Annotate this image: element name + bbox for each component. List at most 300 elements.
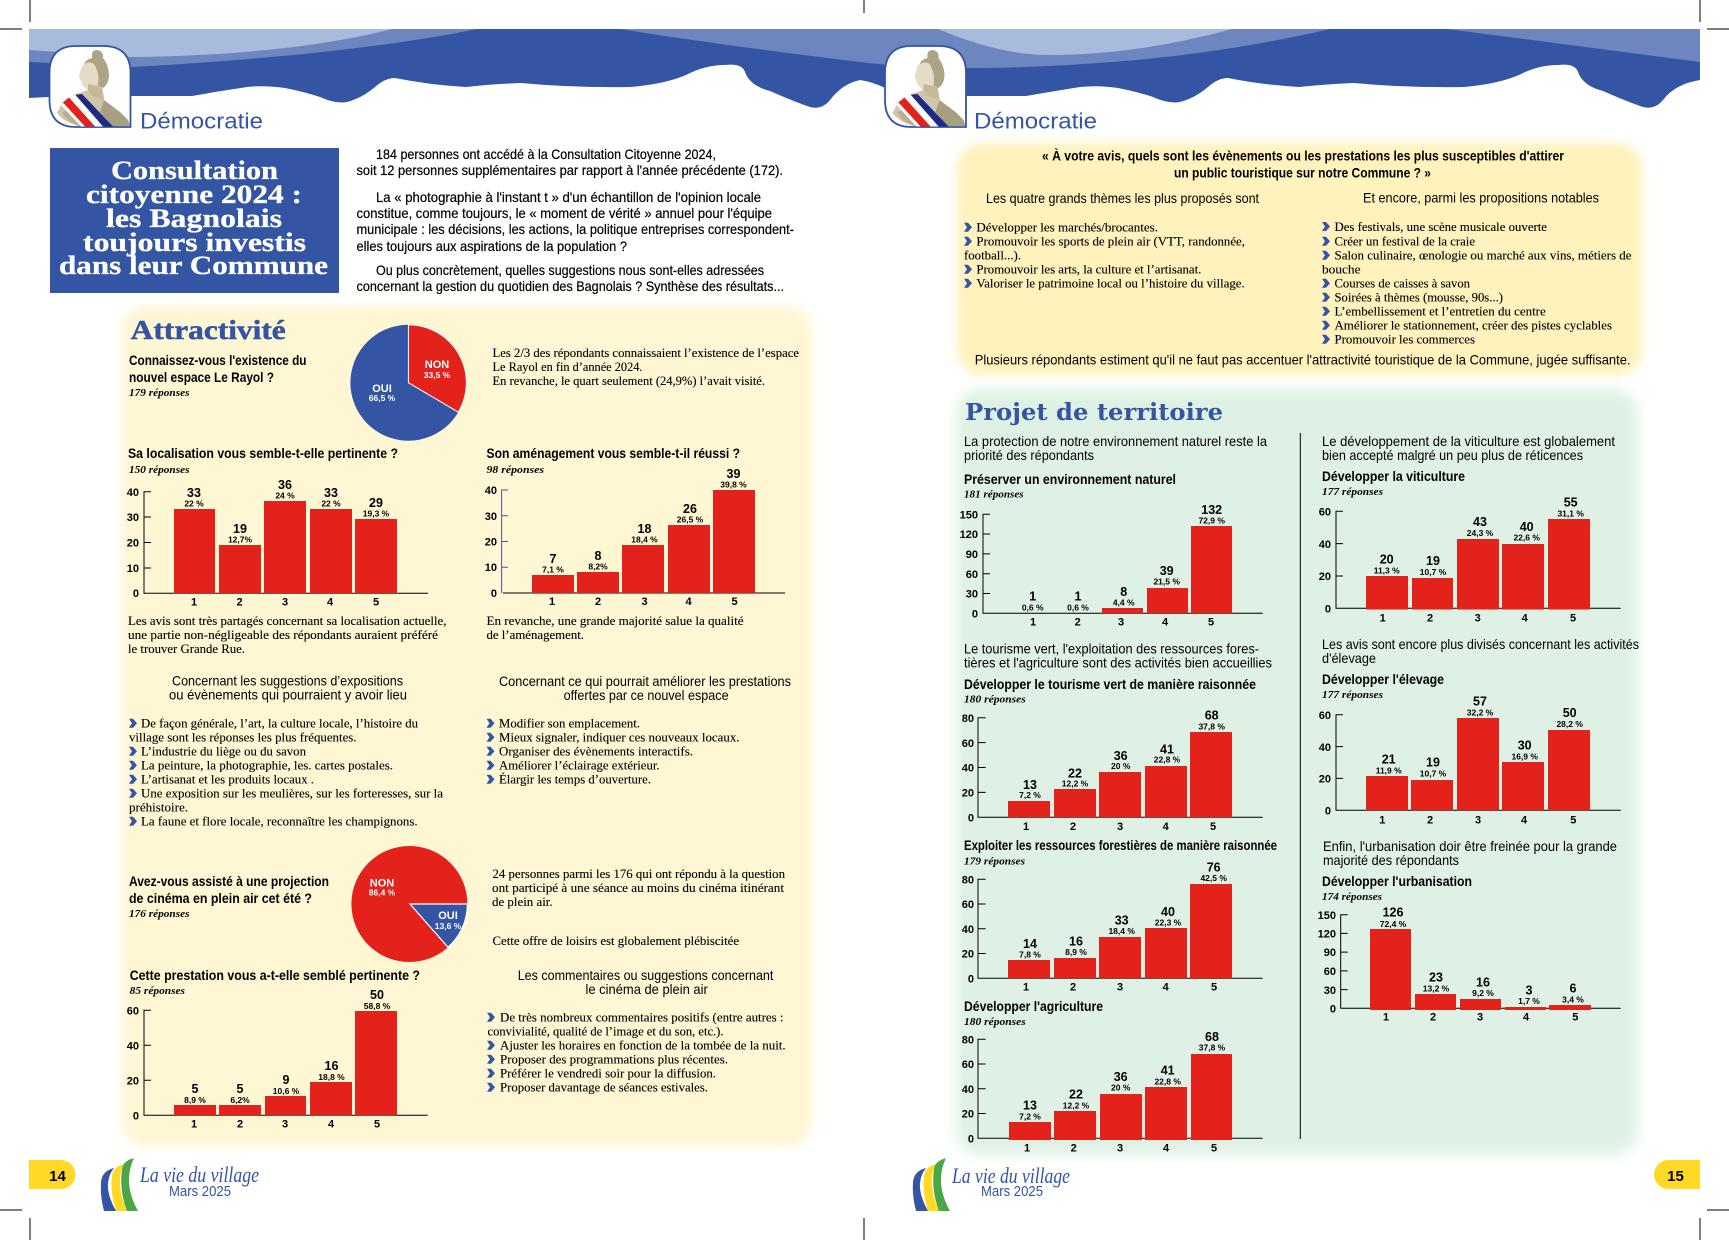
question: prestation cinéma: 85 réponses <box>130 985 185 997</box>
text: commentaire aménagement: de l’aménagement. <box>486 627 584 642</box>
bar chart: ressources forestières: 3 <box>1117 982 1123 994</box>
intro text: municipale : les décisions, les actions, la politique entreprises correspondent- <box>356 221 794 237</box>
text and question: viticulture: 177 réponses <box>1322 486 1383 498</box>
bar chart: environnement naturel: 72,9 % <box>1198 516 1225 526</box>
text and question: environnement naturel: La protection de notre environnement naturel reste la <box>964 433 1267 449</box>
bar chart: prestation cinéma: 1 <box>191 1119 197 1131</box>
bar chart: environnement naturel: 4 <box>1162 617 1169 629</box>
subheading: améliorer les prestations: offertes par ce nouvel espace <box>564 687 729 703</box>
bar chart: élevage: 57 <box>1473 694 1487 708</box>
question: aménagement: Son aménagement vous semble-t-il réussi ? <box>486 445 740 461</box>
question: ressources forestières: Exploiter les ressources forestières de manière raisonnée <box>964 837 1277 853</box>
list: suggestions d'expositions: De façon générale, l’art, la culture locale, l’histoire du <box>141 716 418 731</box>
text: commentaire localisation <box>128 613 446 656</box>
bar chart: prestation cinéma: 3 <box>282 1119 288 1131</box>
pie chart: espace Le Rayol: NON <box>425 359 449 371</box>
list: propositions notables: bouche <box>1322 262 1361 277</box>
text: participation cinéma: de plein air. <box>492 894 553 909</box>
page number 15 <box>1654 1160 1700 1189</box>
bar chart: urbanisation: 3 <box>1477 1012 1483 1024</box>
bar chart: prestation cinéma: 0 <box>133 1110 139 1122</box>
bar chart: viticulture: 0 <box>1325 604 1331 616</box>
bar chart: élevage: 32,2 % <box>1467 708 1494 718</box>
column divider <box>1299 433 1301 1139</box>
conclusion: Plusieurs répondants estiment qu'il ne faut pas accentuer l'attractivité touristique de la Commune, jugée suffisante. <box>975 352 1630 368</box>
subheading: suggestions d'expositions <box>169 673 407 703</box>
bar chart: urbanisation: 120 <box>1318 928 1336 940</box>
bar chart: ressources forestières: 80 <box>962 874 974 886</box>
column heading right: Et encore, parmi les propositions notables <box>1363 190 1599 206</box>
bar chart: ressources forestières: 16 <box>1069 934 1083 948</box>
bar chart: aménagement: 30 <box>485 511 497 523</box>
bar chart: environnement naturel: 30 <box>966 588 978 600</box>
subheading: commentaires cinéma: le cinéma de plein air <box>586 981 708 997</box>
bar chart: tourisme vert: 3 <box>1117 821 1123 833</box>
section label left: Démocratie <box>140 108 263 134</box>
bar chart: aménagement: 7,1 % <box>542 564 564 574</box>
bar chart: agriculture: 80 <box>962 1034 974 1046</box>
text: commentaire aménagement: En revanche, une grande majorité salue la qualité <box>486 613 744 628</box>
bar chart: élevage: 20 <box>1319 774 1331 786</box>
bar chart: environnement naturel: 2 <box>1075 617 1081 629</box>
bar chart: aménagement: 26,5 % <box>677 514 704 524</box>
list: améliorer les prestations: Modifier son emplacement. <box>499 716 640 731</box>
bar chart: environnement naturel: 0,6 % <box>1022 602 1044 612</box>
pie chart: cinéma plein air <box>351 846 467 962</box>
bar chart: urbanisation: 5 <box>1572 1012 1578 1024</box>
list: quatre grands thèmes: football...). <box>964 248 1021 263</box>
bar chart: environnement naturel: 4,4 % <box>1113 597 1135 607</box>
list: suggestions d'expositions: village sont les réponses les plus fréquentes. <box>129 730 356 745</box>
bar chart: environnement naturel: 8 <box>1120 585 1127 599</box>
title box: Consultation <box>111 155 278 185</box>
logo: La vie du village, right <box>913 1158 1070 1211</box>
list: propositions notables: Créer un festival de la craie <box>1334 234 1475 249</box>
question: cinéma plein air: de cinéma en plein air cet été ? <box>129 890 312 906</box>
list: propositions notables: Salon culinaire, œnologie ou marché aux vins, métiers de <box>1334 248 1632 263</box>
question: aménagement: 98 réponses <box>486 464 544 476</box>
bar chart: viticulture: 43 <box>1473 515 1487 529</box>
bar chart: urbanisation: 4 <box>1523 1012 1530 1024</box>
question: ressources forestières: 179 réponses <box>964 855 1025 867</box>
bar chart: ressources forestières: 1 <box>1023 982 1029 994</box>
section label right: Démocratie <box>974 108 1097 134</box>
bar chart: agriculture: 37,8 % <box>1199 1043 1226 1053</box>
bar chart: prestation cinéma: 20 <box>127 1076 139 1088</box>
bar chart: ressources forestières: 18,4 % <box>1108 926 1135 936</box>
question text: « À votre avis, quels sont les évènements ou les prestations les plus susceptibles d'attirer <box>1042 148 1564 164</box>
intro text: 184 personnes ont accédé à la Consultation Citoyenne 2024, <box>376 146 716 162</box>
bar chart: localisation: 2 <box>236 597 243 609</box>
bar chart: urbanisation: 72,4 % <box>1380 919 1407 929</box>
bar chart: élevage: 4 <box>1521 814 1528 826</box>
bar chart: élevage: 2 <box>1427 814 1433 826</box>
bar chart: prestation cinéma: 58,8 % <box>364 1001 391 1011</box>
bar chart: viticulture: 60 <box>1319 506 1331 518</box>
bar chart: agriculture: 2 <box>1071 1143 1077 1155</box>
question block: attractivité touristique <box>964 148 1632 368</box>
bar chart: localisation: 40 <box>127 487 139 499</box>
list: commentaires cinéma <box>487 1010 786 1095</box>
panel: Projet de territoire background <box>956 389 1638 1155</box>
bar chart: tourisme vert: 22 <box>1068 767 1082 781</box>
list: suggestions d'expositions: préhistoire. <box>129 800 188 815</box>
bar chart: élevage <box>1319 694 1621 826</box>
bar chart: urbanisation: 60 <box>1324 966 1336 978</box>
bar chart: agriculture: 68 <box>1205 1030 1219 1044</box>
text: commentaire localisation: Les avis sont très partagés concernant sa localisation actuelle, <box>128 613 446 628</box>
bar chart: aménagement: 2 <box>595 596 601 608</box>
bar chart: urbanisation: 16 <box>1476 976 1490 990</box>
page number 14 <box>29 1160 76 1189</box>
question: espace Le Rayol: Connaissez-vous l'existence du <box>129 352 306 368</box>
bar chart: viticulture: 11,3 % <box>1374 566 1400 576</box>
bar chart: localisation: 33 <box>324 486 338 500</box>
bar chart: ressources forestières: 0 <box>968 974 974 986</box>
bar chart: environnement naturel: 1 <box>1030 617 1036 629</box>
subheading: améliorer les prestations <box>499 673 791 703</box>
bar chart: urbanisation: 6 <box>1570 981 1577 995</box>
bar chart: tourisme vert <box>962 709 1263 833</box>
bar chart: agriculture: 40 <box>962 1084 974 1096</box>
bar chart: environnement naturel: 3 <box>1118 617 1124 629</box>
bar chart: localisation: 36 <box>278 478 292 492</box>
bar chart: localisation: 5 <box>373 597 379 609</box>
bar chart: prestation cinéma: 18,8 % <box>318 1072 345 1082</box>
question: cinéma plein air: Avez-vous assisté à une projection <box>129 873 329 889</box>
bar chart: ressources forestières: 2 <box>1070 982 1076 994</box>
bar chart: localisation: 4 <box>327 597 334 609</box>
bar chart: ressources forestières: 42,5 % <box>1200 873 1227 883</box>
bar chart: aménagement: 7 <box>550 552 557 566</box>
list: commentaires cinéma: Préférer le vendredi soir pour la diffusion. <box>500 1066 716 1081</box>
bar chart: aménagement: 18 <box>638 522 651 536</box>
bar chart: environnement naturel: 150 <box>960 510 978 522</box>
text and question: viticulture <box>1322 433 1615 498</box>
panel: top right question background <box>957 143 1642 375</box>
bar chart: localisation: 1 <box>191 597 197 609</box>
text and question: environnement naturel <box>964 433 1267 501</box>
question: ressources forestières <box>964 837 1277 867</box>
panel: Attractivité background <box>121 306 812 1146</box>
bar chart: localisation: 19,3 % <box>363 508 390 518</box>
list: commentaires cinéma: Proposer davantage de séances estivales. <box>500 1080 708 1095</box>
bar chart: localisation: 24 % <box>275 490 295 500</box>
list: suggestions d'expositions: L’industrie du liège ou du savon <box>141 744 306 759</box>
subheading: améliorer les prestations: Concernant ce qui pourrait améliorer les prestations <box>499 673 791 689</box>
logo: La vie du village, left: La vie du village <box>139 1162 259 1187</box>
text and question: tourisme vert <box>964 640 1272 706</box>
bar chart: aménagement: 18,4 % <box>631 534 658 544</box>
text and question: urbanisation: majorité des répondants <box>1323 852 1459 868</box>
text and question: élevage: Les avis sont encore plus divisés concernant les activités <box>1322 636 1639 652</box>
bar chart: environnement naturel: 60 <box>966 569 978 581</box>
bar chart: ressources forestières: 14 <box>1023 937 1037 951</box>
text and question: urbanisation: Développer l'urbanisation <box>1322 873 1472 889</box>
bar chart: urbanisation: 150 <box>1318 910 1336 922</box>
question: espace Le Rayol: nouvel espace Le Rayol ? <box>129 369 274 385</box>
bar chart: prestation cinéma: 60 <box>127 1006 139 1018</box>
subheading: commentaires cinéma: Les commentaires ou suggestions concernant <box>518 967 773 983</box>
bar chart: agriculture: 36 <box>1114 1070 1128 1084</box>
bar chart: élevage: 21 <box>1382 753 1396 767</box>
subheading: suggestions d'expositions: Concernant les suggestions d’expositions <box>172 673 403 689</box>
bar chart: urbanisation: 0 <box>1330 1004 1336 1016</box>
bar chart: viticulture: 31,1 % <box>1557 508 1584 518</box>
bar chart: prestation cinéma: 9 <box>283 1073 290 1087</box>
bar chart: ressources forestières: 40 <box>962 924 974 936</box>
intro text <box>356 146 794 294</box>
text and question: viticulture: Développer la viticulture <box>1322 468 1465 484</box>
bar chart: prestation cinéma: 8,9 % <box>184 1095 206 1105</box>
bar chart: urbanisation: 30 <box>1324 985 1336 997</box>
pie chart: cinéma plein air: 13,6 % <box>435 921 462 931</box>
text and question: environnement naturel: priorité des répondants <box>964 447 1094 463</box>
bar chart: prestation cinéma <box>127 988 428 1131</box>
bar chart: viticulture: 2 <box>1427 613 1433 625</box>
text and question: élevage: Développer l'élevage <box>1322 671 1444 687</box>
question text: un public touristique sur notre Commune ? » <box>1174 165 1431 181</box>
bar chart: viticulture: 24,3 % <box>1467 528 1494 538</box>
bar chart: tourisme vert: 5 <box>1210 821 1216 833</box>
intro text: elles toujours aux aspirations de la population ? <box>356 238 627 254</box>
bar chart: ressources forestières: 60 <box>962 899 974 911</box>
bar chart: agriculture: 4 <box>1163 1143 1170 1155</box>
bar chart: agriculture: 5 <box>1211 1143 1217 1155</box>
question: espace Le Rayol: 179 réponses <box>129 387 190 399</box>
subheading: suggestions d'expositions: ou évènements qui pourraient y avoir lieu <box>169 687 407 703</box>
intro text: constitue, comme toujours, le « moment de vérité » annuel pour l'équipe <box>356 205 772 221</box>
bar chart: tourisme vert: 37,8 % <box>1198 721 1225 731</box>
logo: La vie du village, left <box>101 1158 259 1211</box>
bar chart: localisation: 22 % <box>184 499 204 509</box>
bar chart: prestation cinéma: 2 <box>237 1119 243 1131</box>
bar chart: aménagement: 5 <box>731 596 738 608</box>
bar chart: agriculture: 22 <box>1069 1087 1083 1101</box>
bar chart: tourisme vert: 68 <box>1205 709 1219 723</box>
logo: La vie du village, right: La vie du village <box>951 1163 1070 1188</box>
bar chart: urbanisation: 90 <box>1324 947 1336 959</box>
bar chart: aménagement: 39,8 % <box>720 480 747 490</box>
text: commentaire localisation: le trouver Grande Rue. <box>128 641 245 656</box>
bar chart: ressources forestières: 8,9 % <box>1065 947 1087 957</box>
bar chart: urbanisation: 1,7 % <box>1518 996 1540 1006</box>
bar chart: viticulture: 55 <box>1564 495 1578 509</box>
list: quatre grands thèmes: Développer les marchés/brocantes. <box>976 220 1158 235</box>
list: suggestions d'expositions: La peinture, la photographie, les. cartes postales. <box>141 758 393 773</box>
header wave band <box>29 29 1700 108</box>
text and question: environnement naturel: 181 réponses <box>964 489 1024 501</box>
list: propositions notables: L’embellissement et l’entretien du centre <box>1334 304 1546 319</box>
bar chart: ressources forestières: 20 <box>962 948 974 960</box>
list: améliorer les prestations <box>486 716 740 787</box>
bar chart: localisation: 19 <box>233 522 247 536</box>
bar chart: aménagement: 3 <box>641 596 648 608</box>
question: espace Le Rayol <box>129 352 306 399</box>
title box: les Bagnolais <box>106 203 282 233</box>
bar chart: tourisme vert: 40 <box>962 762 974 774</box>
intro text: concernant la gestion du quotidien des Bagnolais ? Synthèse des résultats... <box>356 278 784 294</box>
bar chart: urbanisation: 2 <box>1430 1012 1436 1024</box>
text and question: élevage: d'élevage <box>1322 650 1376 666</box>
text and question: tourisme vert: 180 réponses <box>964 694 1026 706</box>
text: participation cinéma: 24 personnes parmi les 176 qui ont répondu à la question <box>492 866 785 881</box>
bar chart: élevage: 50 <box>1563 706 1577 720</box>
bar chart: viticulture: 22,6 % <box>1513 533 1540 543</box>
text: commentaire aménagement <box>486 613 744 642</box>
intro text: La « photographie à l'instant t » d'un échantillon de l'opinion locale <box>376 189 761 205</box>
list: quatre grands thèmes: Promouvoir les sports de plein air (VTT, randonnée, <box>976 234 1245 249</box>
bar chart: environnement naturel: 1 <box>1075 590 1082 604</box>
bar chart: environnement naturel: 5 <box>1208 617 1214 629</box>
bar chart: localisation: 10 <box>127 563 139 575</box>
bar chart: tourisme vert: 20 <box>962 788 974 800</box>
bar chart: élevage: 3 <box>1475 814 1481 826</box>
bar chart: ressources forestières: 22,3 % <box>1155 918 1182 928</box>
bar chart: ressources forestières: 4 <box>1163 982 1170 994</box>
bar chart: agriculture <box>962 1030 1263 1155</box>
list: améliorer les prestations: Améliorer l’éclairage extérieur. <box>499 758 660 773</box>
page number 15: 15 <box>1667 1168 1684 1185</box>
bar chart: localisation: 22 % <box>321 499 341 509</box>
bar chart: viticulture: 5 <box>1570 613 1576 625</box>
list: améliorer les prestations: Mieux signaler, indiquer ces nouveaux locaux. <box>499 730 740 745</box>
bar chart: viticulture: 19 <box>1426 554 1440 568</box>
list: quatre grands thèmes <box>964 220 1245 291</box>
column heading left: Les quatre grands thèmes les plus proposés sont <box>986 190 1259 206</box>
title box: citoyenne 2024 : <box>86 179 302 209</box>
bar chart: ressources forestières: 5 <box>1211 982 1217 994</box>
bar chart: tourisme vert: 13 <box>1023 778 1037 792</box>
question: prestation cinéma <box>130 967 420 997</box>
bar chart: agriculture: 22,8 % <box>1154 1077 1181 1087</box>
bar chart: agriculture: 20 <box>962 1108 974 1120</box>
bar chart: tourisme vert: 0 <box>968 812 974 824</box>
list: améliorer les prestations: Organiser des évènements interactifs. <box>499 744 693 759</box>
text and question: élevage: 177 réponses <box>1322 689 1383 701</box>
bar chart: prestation cinéma: 6,2% <box>230 1095 250 1105</box>
bar chart: environnement naturel: 0,6 % <box>1067 602 1089 612</box>
text and question: viticulture: Le développement de la viticulture est globalement <box>1322 433 1615 449</box>
bar chart: ressources forestières <box>962 860 1263 994</box>
pie chart: cinéma plein air: OUI <box>438 910 458 922</box>
bar chart: localisation: 29 <box>369 496 383 510</box>
bar chart: élevage: 0 <box>1325 806 1331 818</box>
bar chart: élevage: 40 <box>1319 742 1331 754</box>
bar chart: aménagement: 10 <box>485 562 497 574</box>
bar chart: agriculture: 0 <box>968 1134 974 1146</box>
heading: Attractivité: Attractivité <box>131 315 286 345</box>
list: propositions notables: Améliorer le stationnement, créer des pistes cyclables <box>1334 318 1612 333</box>
list: suggestions d'expositions: La faune et flore locale, reconnaître les champignons. <box>141 814 418 829</box>
bar chart: tourisme vert: 1 <box>1023 821 1029 833</box>
bar chart: tourisme vert: 80 <box>962 713 974 725</box>
bar chart: agriculture: 1 <box>1024 1143 1030 1155</box>
bar chart: urbanisation <box>1318 906 1621 1024</box>
bar chart: viticulture: 40 <box>1319 539 1331 551</box>
text and question: tourisme vert: Développer le tourisme vert de manière raisonnée <box>964 676 1256 692</box>
bar chart: environnement naturel: 0 <box>972 608 978 620</box>
text: participation cinéma: Cette offre de loisirs est globalement plébiscitée <box>492 933 739 948</box>
bar chart: localisation: 12,7% <box>228 534 252 544</box>
title box: dans leur Commune <box>59 250 328 280</box>
bar chart: tourisme vert: 2 <box>1070 821 1076 833</box>
bar chart: tourisme vert: 36 <box>1114 749 1128 763</box>
bar chart: environnement naturel <box>960 503 1263 629</box>
pie chart: cinéma plein air: NON <box>370 878 394 890</box>
bar chart: urbanisation: 13,2 % <box>1423 984 1450 994</box>
bar chart: urbanisation: 3,4 % <box>1562 995 1584 1005</box>
question: cinéma plein air <box>129 873 329 920</box>
bar chart: élevage: 19 <box>1426 755 1440 769</box>
text: connaissance du lieu <box>492 345 799 388</box>
icon: Marianne bust, right page <box>885 46 966 127</box>
bar chart: viticulture: 20 <box>1319 571 1331 583</box>
bar chart: environnement naturel: 120 <box>960 529 978 541</box>
question text <box>1042 148 1564 181</box>
text and question: élevage <box>1322 636 1639 701</box>
question: aménagement <box>486 445 740 476</box>
bar chart: aménagement <box>485 467 785 608</box>
list: propositions notables: Soirées à thèmes (mousse, 90s...) <box>1334 290 1503 305</box>
text and question: environnement naturel: Préserver un environnement naturel <box>964 471 1176 487</box>
list: commentaires cinéma: Proposer des programmations plus récentes. <box>500 1052 728 1067</box>
list: améliorer les prestations: Élargir les temps d’ouverture. <box>499 772 651 787</box>
text: connaissance du lieu: En revanche, le quart seulement (24,9%) l’avait visité. <box>492 373 765 388</box>
bar chart: agriculture: 60 <box>962 1059 974 1071</box>
bar chart: élevage: 28,2 % <box>1556 719 1583 729</box>
bar chart: environnement naturel: 1 <box>1029 590 1036 604</box>
bar chart: agriculture: 41 <box>1161 1064 1175 1078</box>
bar chart: viticulture: 1 <box>1380 613 1386 625</box>
list: propositions notables: Des festivals, une scène musicale ouverte <box>1334 219 1547 234</box>
list: propositions notables <box>1322 219 1632 347</box>
text: participation cinéma: ont participé à une séance au moins du cinéma itinérant <box>492 880 784 895</box>
bar chart: aménagement: 1 <box>549 596 555 608</box>
bar chart: aménagement: 20 <box>485 536 497 548</box>
bar chart: tourisme vert: 4 <box>1163 821 1170 833</box>
bar chart: élevage: 60 <box>1319 710 1331 722</box>
bar chart: viticulture: 3 <box>1475 613 1481 625</box>
logo: La vie du village, left: Mars 2025 <box>169 1183 231 1200</box>
list: suggestions d'expositions: L’artisanat et les produits locaux . <box>141 772 314 787</box>
bar chart: tourisme vert: 12,2 % <box>1062 779 1089 789</box>
bar chart: agriculture: 7,2 % <box>1019 1111 1041 1121</box>
list: commentaires cinéma: convivialité, qualité de l’image et du son, etc.). <box>488 1024 724 1039</box>
pie chart: espace Le Rayol: OUI <box>372 383 392 395</box>
bar chart: prestation cinéma: 4 <box>328 1119 335 1131</box>
bar chart: aménagement: 26 <box>683 502 697 516</box>
text and question: viticulture: bien accepté malgré un peu plus de réticences <box>1322 447 1583 463</box>
question: agriculture: 180 réponses <box>964 1016 1026 1028</box>
bar chart: viticulture: 10,7 % <box>1420 567 1447 577</box>
bar chart: environnement naturel: 90 <box>966 549 978 561</box>
bar chart: viticulture: 20 <box>1380 552 1394 566</box>
bar chart: viticulture: 4 <box>1522 613 1529 625</box>
list: quatre grands thèmes: Promouvoir les arts, la culture et l’artisanat. <box>976 262 1201 277</box>
bar chart: prestation cinéma: 40 <box>127 1040 139 1052</box>
bar chart: aménagement: 8,2% <box>588 562 608 572</box>
bar chart: aménagement: 40 <box>485 485 497 497</box>
bar chart: agriculture: 20 % <box>1111 1083 1131 1093</box>
list: quatre grands thèmes: Valoriser le patrimoine local ou l’histoire du village. <box>976 276 1245 291</box>
bar chart: localisation <box>127 478 428 609</box>
bar chart: environnement naturel: 21,5 % <box>1153 577 1180 587</box>
bar chart: urbanisation: 3 <box>1526 983 1533 997</box>
bar chart: urbanisation: 9,2 % <box>1472 988 1494 998</box>
bar chart: prestation cinéma: 50 <box>370 988 384 1002</box>
bar chart: localisation: 20 <box>127 538 139 550</box>
